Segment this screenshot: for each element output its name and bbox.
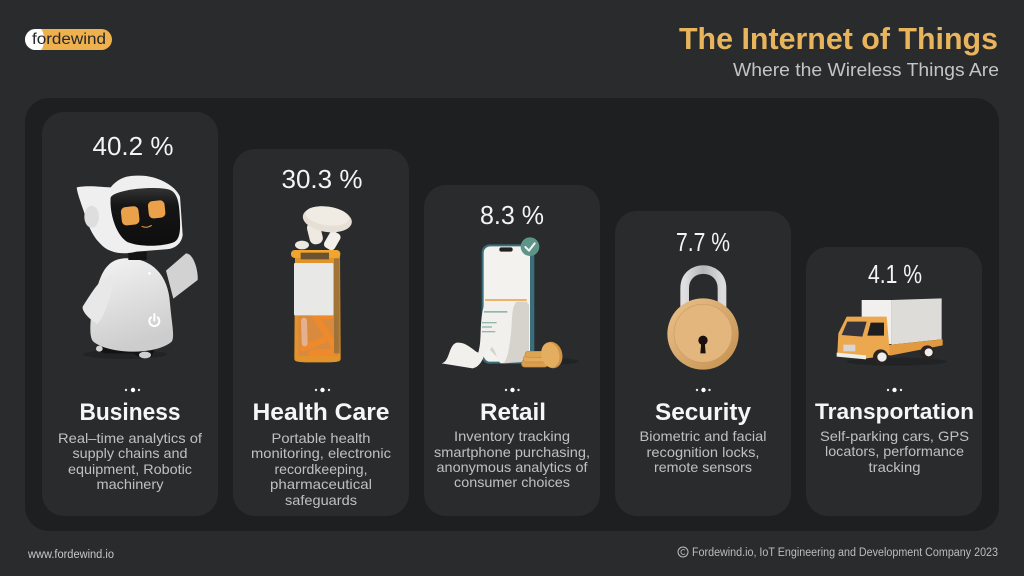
security percentage: 7.7 %: [676, 227, 730, 257]
security heading: Security: [655, 399, 752, 426]
security description: remote sensors: [654, 459, 752, 475]
icon: robot: [77, 176, 198, 359]
transportation heading: Transportation: [815, 399, 974, 424]
health care dots: [315, 388, 330, 392]
transportation description: tracking: [868, 459, 920, 475]
footer copyright: Fordewind.io, IoT Engineering and Development Company 2023: [692, 547, 998, 559]
business description: supply chains and: [72, 445, 188, 461]
business heading: Business: [80, 399, 180, 426]
health care percentage: 30.3 %: [282, 164, 362, 194]
business description: machinery: [96, 476, 164, 492]
business percentage: 40.2 %: [92, 131, 174, 161]
icon: pill bottle: [291, 203, 354, 362]
transportation percentage: 4.1 %: [868, 259, 922, 289]
transportation dots: [887, 388, 902, 392]
icon: delivery truck: [837, 298, 947, 366]
title: The Internet of Things: [679, 21, 998, 56]
security description: recognition locks,: [646, 444, 760, 460]
health care description: [251, 430, 391, 508]
health care description: Portable health: [272, 430, 370, 446]
business description: Real–time analytics of: [58, 430, 202, 446]
business dots: [125, 388, 140, 392]
health care description: pharmaceutical: [270, 476, 372, 492]
panel: retail: [424, 185, 600, 516]
retail description: smartphone purchasing,: [434, 444, 590, 460]
transportation description: Self-parking cars, GPS: [820, 428, 969, 444]
retail description: consumer choices: [454, 474, 570, 490]
retail description: Inventory tracking: [454, 428, 570, 444]
health care description: recordkeeping,: [274, 461, 368, 477]
panel: transportation: [806, 247, 982, 516]
icon: padlock: [667, 270, 739, 370]
footer website: www.fordewind.io: [27, 549, 114, 561]
security description: Biometric and facial: [640, 428, 766, 444]
transportation description: [820, 428, 969, 475]
business description: [58, 430, 202, 492]
panel: business: [42, 112, 218, 516]
logo: [25, 29, 112, 50]
logo: fordewind: [32, 31, 106, 48]
subtitle: Where the Wireless Things Are: [733, 59, 999, 80]
retail description: anonymous analytics of: [436, 459, 588, 475]
security dots: [696, 388, 711, 392]
health care description: monitoring, electronic: [251, 445, 391, 461]
health care heading: Health Care: [252, 399, 390, 426]
transportation description: locators, performance: [825, 443, 964, 459]
retail dots: [505, 388, 520, 392]
retail percentage: 8.3 %: [480, 200, 544, 230]
retail heading: Retail: [480, 399, 546, 426]
security description: [640, 428, 766, 475]
business description: equipment, Robotic: [68, 461, 192, 477]
retail description: [434, 428, 590, 490]
background panel: [25, 98, 999, 531]
icon: phone, receipt and coins: [442, 237, 578, 370]
panel: health care: [233, 149, 409, 516]
panel: security: [615, 211, 791, 516]
health care description: safeguards: [285, 492, 357, 508]
